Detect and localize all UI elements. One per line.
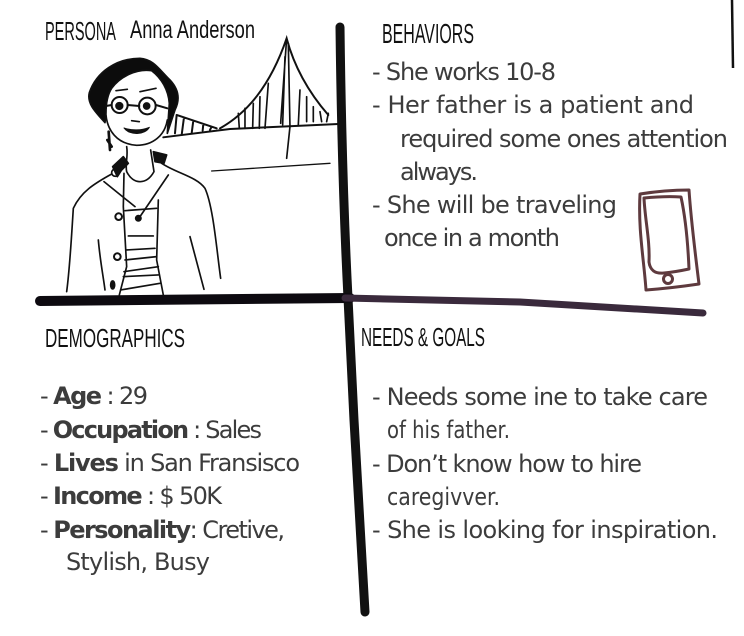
text block: behaviors: once in a month — [384, 224, 560, 252]
text block: demographics — [40, 382, 300, 576]
heading: needs and goals: NEEDS & GOALS — [361, 322, 485, 352]
heading: behaviors: BEHAVIORS — [382, 18, 474, 49]
text block: behaviors: - Her father is a patient and — [372, 91, 694, 119]
hair — [89, 58, 178, 133]
text block: needs and goals: - Don’t know how to hire — [372, 450, 642, 478]
text block: needs and goals: of his father. — [387, 416, 510, 444]
heading: persona name — [45, 16, 255, 46]
heading: persona name: PERSONA — [45, 16, 116, 46]
text block: needs and goals: - Needs some ine to take care — [372, 383, 708, 411]
jacket collar — [113, 152, 167, 177]
horizontal divider line — [40, 298, 703, 313]
vertical divider line — [340, 27, 365, 612]
neck and neckline — [126, 147, 154, 182]
jacket — [67, 163, 221, 295]
top right page edge — [732, 0, 733, 68]
earring — [107, 132, 112, 150]
text block: behaviors: always. — [400, 158, 478, 186]
text block: behaviors: - She works 10-8 — [372, 58, 556, 86]
text block: demographics: - Income : $ 50K — [40, 482, 223, 510]
jacket buttons — [115, 213, 122, 220]
text block: demographics: - Age : 29 — [40, 382, 148, 410]
text block: behaviors: required some ones attention — [400, 125, 728, 153]
heading: demographics: DEMOGRAPHICS — [45, 323, 185, 353]
shirt stripes — [121, 208, 160, 290]
text block: demographics: - Personality: Cretive, — [40, 516, 285, 544]
text block: needs and goals — [372, 383, 718, 544]
illustration: bridge — [163, 38, 338, 171]
heading: persona name: Anna Anderson — [130, 16, 255, 44]
text block: demographics: - Occupation : Sales — [40, 416, 262, 444]
brows, nose, mouth — [116, 88, 156, 122]
text block: demographics: Stylish, Busy — [66, 548, 210, 576]
text block: needs and goals: - She is looking for inspiration. — [372, 516, 718, 544]
icon: smartphone sketch — [640, 190, 699, 290]
text block: needs and goals: caregivver. — [387, 483, 500, 511]
text block: behaviors: - She will be traveling — [372, 191, 617, 219]
illustration: woman portrait — [67, 58, 221, 295]
face outline — [106, 115, 167, 145]
text block: behaviors — [372, 58, 728, 252]
text block: demographics: - Lives in San Fransisco — [40, 449, 300, 477]
glasses — [106, 105, 167, 108]
